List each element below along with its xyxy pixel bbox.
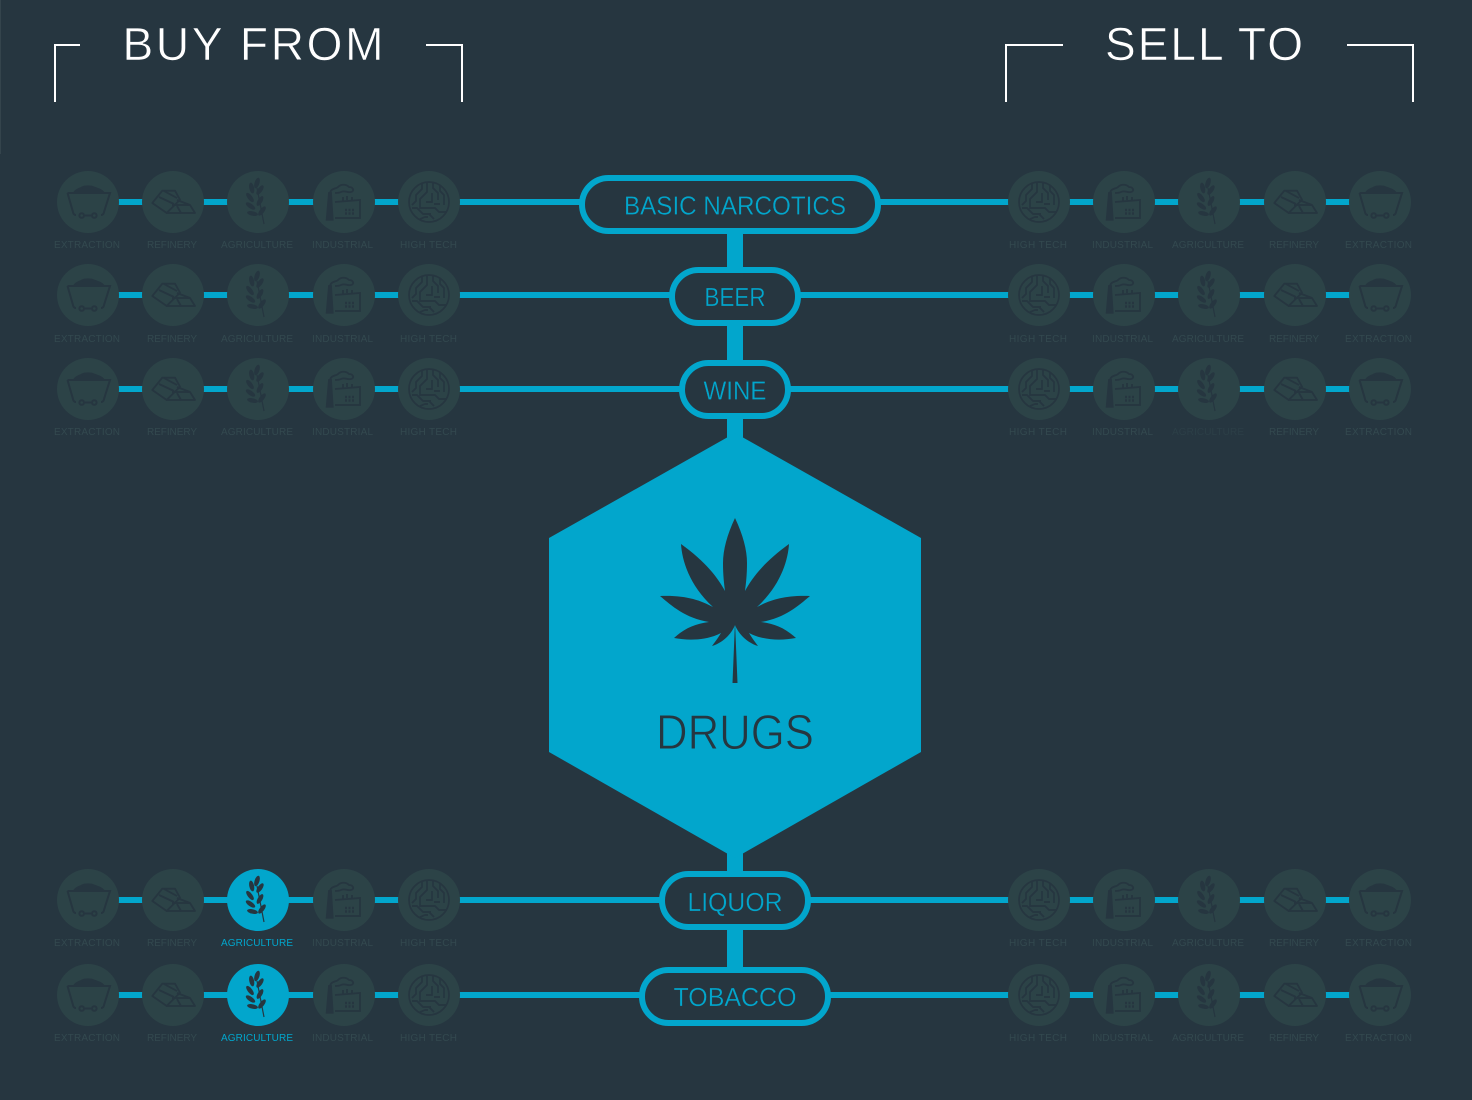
heading: sell to: SELL TO (1105, 18, 1303, 70)
row: liquor: INDUSTRIAL (312, 938, 373, 949)
row: tobacco: AGRICULTURE (1172, 1033, 1244, 1044)
row: liquor: HIGH TECH (1009, 938, 1067, 949)
row: tobacco: EXTRACTION (1345, 1033, 1412, 1044)
active: agriculture (221, 964, 293, 1044)
row: basic narcotics: REFINERY (1269, 240, 1319, 251)
active: agriculture (221, 869, 293, 949)
row: liquor: INDUSTRIAL (1092, 938, 1153, 949)
row: wine: INDUSTRIAL (1092, 427, 1153, 438)
row: beer: INDUSTRIAL (312, 334, 373, 345)
row: liquor: EXTRACTION (54, 938, 120, 949)
row: wine: AGRICULTURE (221, 427, 293, 438)
row: beer: INDUSTRIAL (1092, 334, 1153, 345)
row: basic narcotics: EXTRACTION (1345, 240, 1412, 251)
row: basic narcotics: BASIC NARCOTICS (624, 192, 846, 220)
row: tobacco: TOBACCO (674, 984, 796, 1012)
row: wine: EXTRACTION (1345, 427, 1412, 438)
row: wine: AGRICULTURE (1172, 427, 1244, 438)
row: tobacco: HIGH TECH (1009, 1033, 1067, 1044)
heading: buy from (55, 18, 462, 102)
row: liquor: AGRICULTURE (1172, 938, 1244, 949)
heading: sell to (1006, 18, 1413, 102)
row: liquor: REFINERY (1269, 938, 1319, 949)
row: tobacco (54, 964, 1412, 1044)
row: liquor: HIGH TECH (400, 938, 457, 949)
icon: cannabis leaf (660, 518, 810, 683)
row: beer: REFINERY (147, 334, 197, 345)
row: basic narcotics: AGRICULTURE (1172, 240, 1244, 251)
row: beer: AGRICULTURE (221, 334, 293, 345)
row: beer (54, 264, 1412, 345)
row: basic narcotics: HIGH TECH (1009, 240, 1067, 251)
row: basic narcotics: EXTRACTION (54, 240, 120, 251)
row: beer: HIGH TECH (1009, 334, 1067, 345)
row: wine: INDUSTRIAL (312, 427, 373, 438)
row: wine: REFINERY (147, 427, 197, 438)
row: beer: EXTRACTION (54, 334, 120, 345)
row: basic narcotics: AGRICULTURE (221, 240, 293, 251)
row: basic narcotics: HIGH TECH (400, 240, 457, 251)
row: beer: BEER (704, 284, 766, 312)
row: tobacco: HIGH TECH (400, 1033, 457, 1044)
row: basic narcotics: INDUSTRIAL (1092, 240, 1153, 251)
row: wine: EXTRACTION (54, 427, 120, 438)
row: beer: EXTRACTION (1345, 334, 1412, 345)
hexagon label: DRUGS (656, 706, 814, 760)
row: liquor (54, 869, 1412, 949)
row: tobacco: REFINERY (1269, 1033, 1319, 1044)
row: beer: HIGH TECH (400, 334, 457, 345)
row: basic narcotics (54, 171, 1412, 251)
row: liquor: LIQUOR (688, 889, 782, 917)
row: tobacco: INDUSTRIAL (312, 1033, 373, 1044)
row: beer: AGRICULTURE (1172, 334, 1244, 345)
active: agriculture: AGRICULTURE (221, 938, 293, 949)
row: liquor: REFINERY (147, 938, 197, 949)
row: basic narcotics: INDUSTRIAL (312, 240, 373, 251)
row: beer: REFINERY (1269, 334, 1319, 345)
row: tobacco: REFINERY (147, 1033, 197, 1044)
active: agriculture: AGRICULTURE (221, 1033, 293, 1044)
row: wine: REFINERY (1269, 427, 1319, 438)
row: tobacco: INDUSTRIAL (1092, 1033, 1153, 1044)
central connector spine (727, 200, 743, 1000)
row: wine: HIGH TECH (1009, 427, 1067, 438)
row: wine: HIGH TECH (400, 427, 457, 438)
hexagon: drugs (549, 433, 921, 858)
row: basic narcotics: REFINERY (147, 240, 197, 251)
row: wine (54, 358, 1412, 438)
row: liquor: EXTRACTION (1345, 938, 1412, 949)
row: wine: WINE (704, 378, 766, 406)
heading: buy from: BUY FROM (122, 18, 384, 70)
row: tobacco: EXTRACTION (54, 1033, 120, 1044)
